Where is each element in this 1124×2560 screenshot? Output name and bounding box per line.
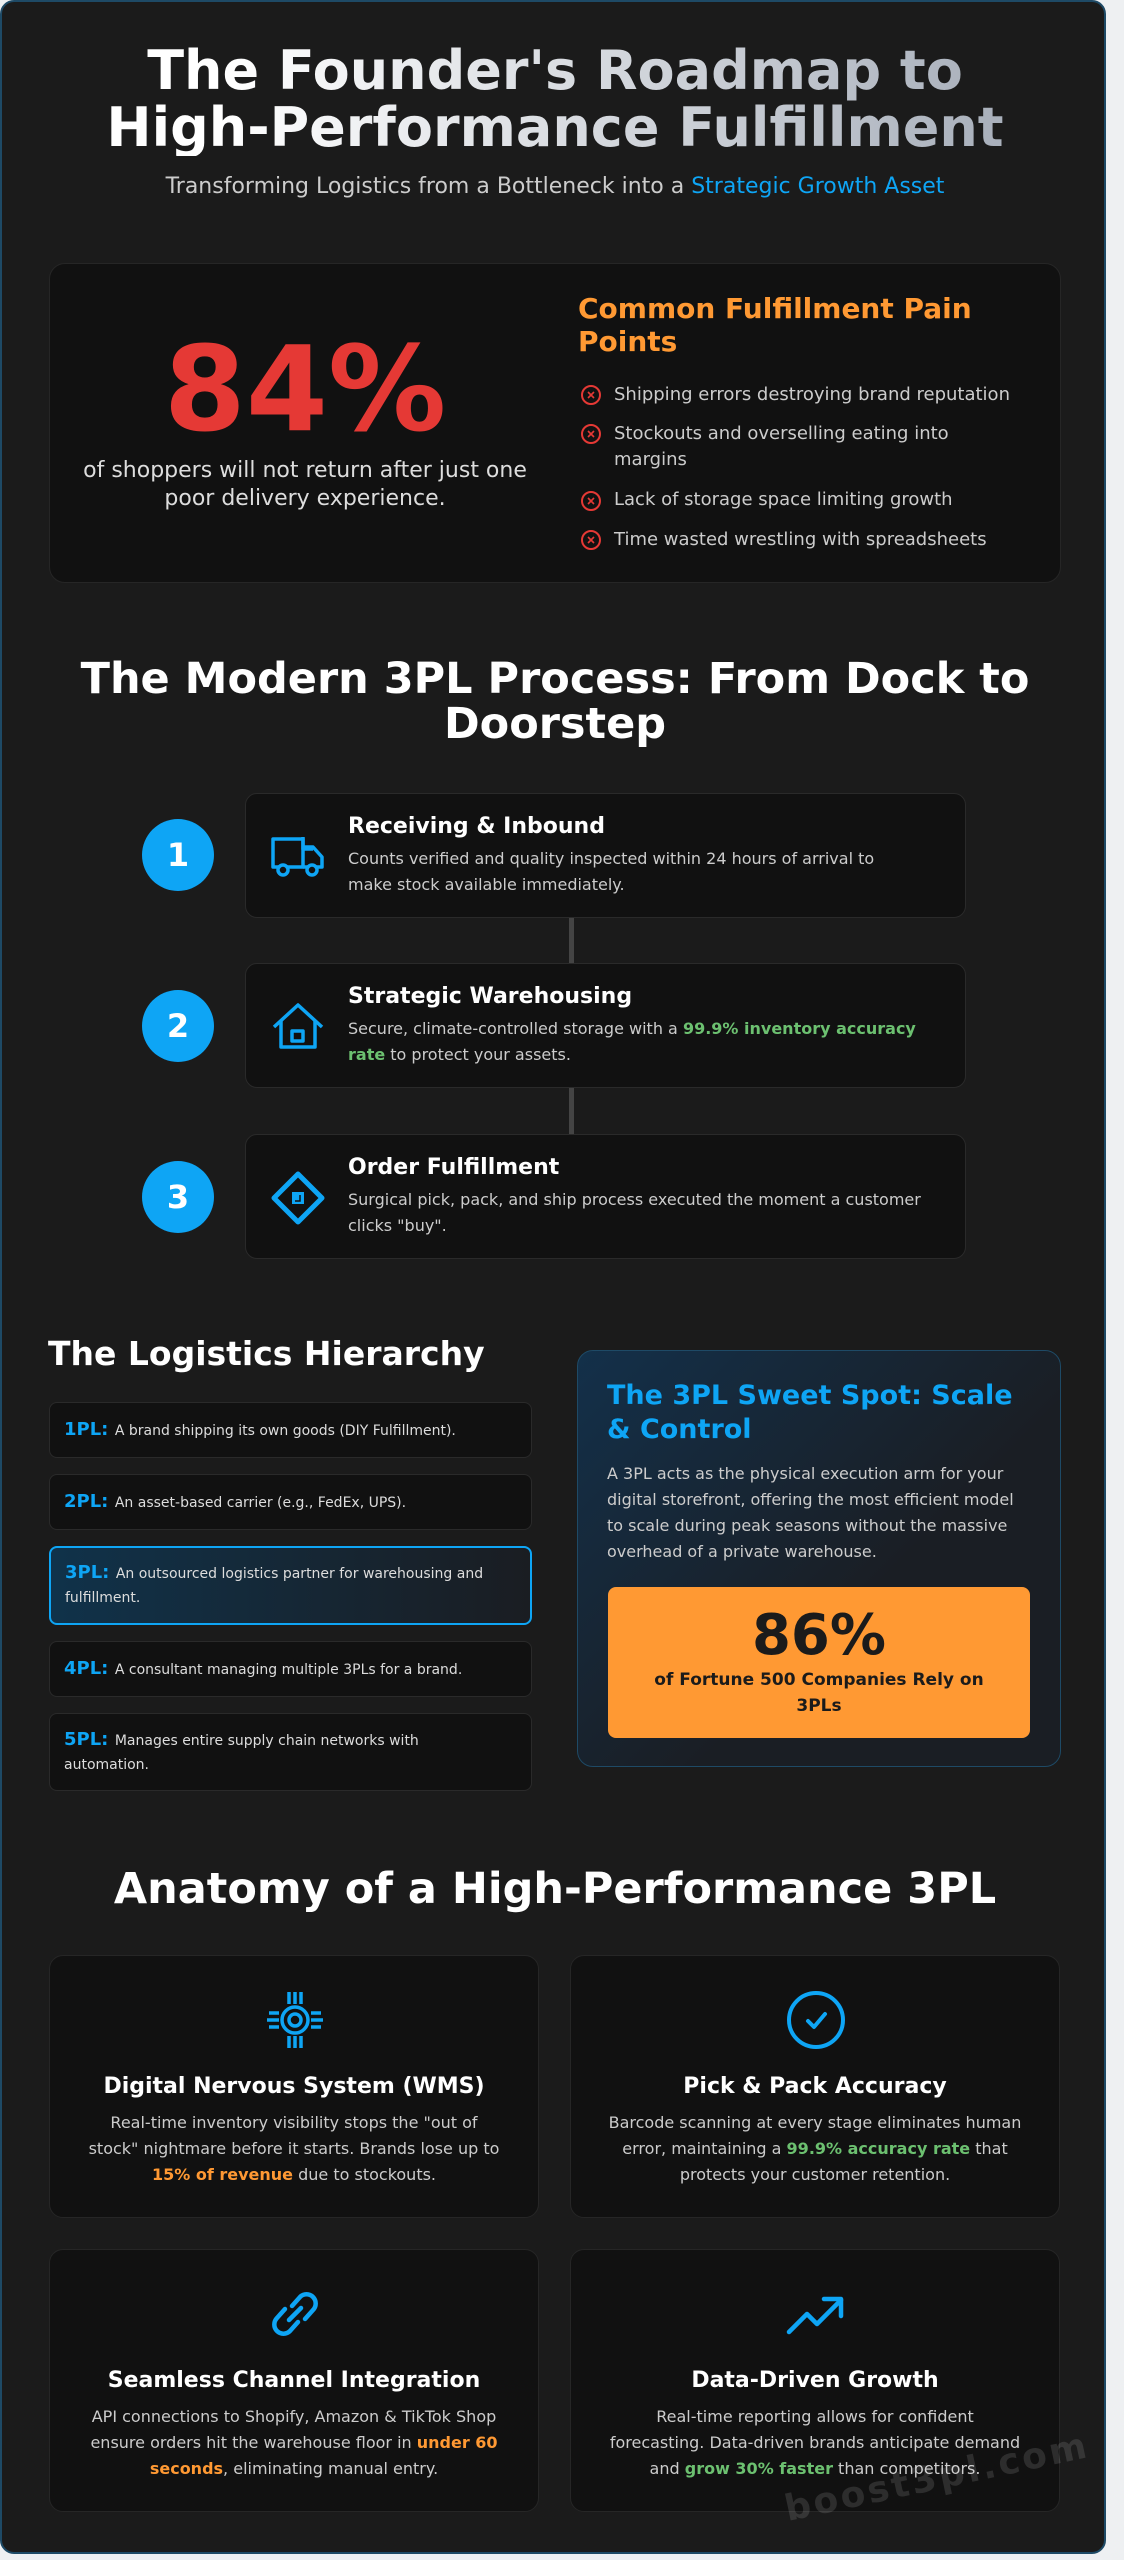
title bbox=[2, 42, 1108, 156]
feature: channel integration: Seamless Channel Integration bbox=[108, 2368, 480, 2393]
feature: WMS: Digital Nervous System (WMS) bbox=[103, 2074, 485, 2099]
stat box 86% bbox=[608, 1587, 1030, 1738]
icon: check circle bbox=[787, 1991, 845, 2049]
feature: WMS bbox=[49, 1955, 539, 2218]
hierarchy list: 4PL: A consultant managing multiple 3PLs for a brand. bbox=[64, 1658, 462, 1678]
feature: data-driven growth: Real-time reporting allows for confident bbox=[656, 2407, 974, 2426]
watermark: boost3pl.com bbox=[781, 2425, 1093, 2530]
feature: channel integration: API connections to Shopify, Amazon & TikTok Shop bbox=[92, 2407, 496, 2426]
panel: stat and pain points: Time wasted wrestling with spreadsheets bbox=[614, 529, 987, 550]
stat caption: of shoppers will not return after just one poor delivery experience. bbox=[83, 458, 527, 511]
feature: data-driven growth bbox=[570, 2249, 1060, 2512]
feature: WMS: Real-time inventory visibility stops the "out of bbox=[110, 2113, 478, 2132]
number circle 3 bbox=[142, 1161, 214, 1233]
hierarchy list: 2PL: An asset-based carrier (e.g., FedEx, UPS). bbox=[64, 1490, 406, 1512]
feature: pick & pack: Barcode scanning at every stage eliminates human bbox=[609, 2113, 1021, 2132]
title: The Founder's Roadmap to bbox=[147, 39, 963, 102]
step 2: Strategic Warehousing bbox=[348, 984, 632, 1009]
feature: data-driven growth: and grow 30% faster than competitors. bbox=[650, 2459, 980, 2478]
sweet spot heading: The 3PL Sweet Spot: Scale & Control bbox=[607, 1380, 1013, 1445]
hierarchy list: 5PL: Manages entire supply chain networks with bbox=[64, 1728, 419, 1750]
sweet spot paragraph bbox=[607, 1464, 1014, 1561]
panel: stat and pain points bbox=[49, 263, 1061, 583]
sweet spot paragraph: A 3PL acts as the physical execution arm for your digital storefront, offering the most efficient model bbox=[607, 1464, 1014, 1509]
icon: diamond package bbox=[272, 1172, 324, 1224]
icon: link bbox=[272, 2292, 318, 2336]
heading: logistics hierarchy: The Logistics Hierarchy bbox=[48, 1334, 485, 1373]
feature: WMS: 15% of revenue due to stockouts. bbox=[152, 2165, 436, 2184]
feature: pick & pack: protects your customer retention. bbox=[680, 2165, 950, 2184]
heading: modern 3PL process: Doorstep bbox=[444, 699, 666, 749]
heading: modern 3PL process: The Modern 3PL Process: From Dock to bbox=[81, 654, 1029, 704]
title: High-Performance Fulfillment bbox=[106, 96, 1004, 159]
hierarchy list bbox=[49, 1402, 532, 1791]
heading: anatomy: Anatomy of a High-Performance 3PL bbox=[114, 1864, 996, 1914]
step 1 bbox=[142, 793, 966, 918]
icon: trending up bbox=[786, 2296, 844, 2334]
stat box 86%: 86% bbox=[752, 1603, 886, 1668]
feature: data-driven growth: forecasting. Data-driven brands anticipate demand bbox=[610, 2433, 1020, 2452]
pain points list bbox=[581, 384, 1010, 550]
icon: warehouse house bbox=[272, 1003, 324, 1049]
number circle 1: 1 bbox=[167, 836, 189, 874]
feature: data-driven growth: Data-Driven Growth bbox=[691, 2368, 939, 2393]
feature: WMS: stock" nightmare before it starts. Brands lose up to bbox=[89, 2139, 499, 2158]
hierarchy list: 3PL: An outsourced logistics partner for warehousing and fulfillment. bbox=[65, 1562, 483, 1606]
number circle 2: 2 bbox=[167, 1007, 189, 1045]
icon: chip bbox=[267, 1992, 323, 2048]
feature: channel integration: ensure orders hit the warehouse floor in under 60 bbox=[90, 2433, 498, 2452]
panel: 3PL sweet spot bbox=[577, 1350, 1061, 1767]
connector lines bbox=[569, 917, 574, 1134]
feature: pick & pack bbox=[570, 1955, 1060, 2218]
subtitle: Transforming Logistics from a Bottleneck into a Strategic Growth Asset bbox=[166, 174, 944, 199]
heading: modern 3PL process bbox=[80, 654, 1029, 749]
feature: pick & pack: error, maintaining a 99.9% accuracy rate that bbox=[622, 2139, 1008, 2158]
big stat 84%: 84% bbox=[164, 320, 446, 458]
step 3: Order Fulfillment bbox=[348, 1155, 559, 1180]
step 3 bbox=[142, 1134, 966, 1259]
number circle 2 bbox=[142, 990, 214, 1062]
pain points heading: Common Fulfillment Pain Points bbox=[578, 292, 972, 358]
step 1: Counts verified and quality inspected within 24 hours of arrival to make stock available immediately. bbox=[348, 849, 874, 894]
hierarchy list: 1PL: A brand shipping its own goods (DIY Fulfillment). bbox=[64, 1418, 456, 1440]
hierarchy list: automation. bbox=[64, 1756, 149, 1772]
panel: stat and pain points: Lack of storage space limiting growth bbox=[614, 489, 953, 510]
step 1: Receiving & Inbound bbox=[348, 814, 605, 839]
number circle 3: 3 bbox=[167, 1178, 189, 1216]
sweet spot paragraph: to scale during peak seasons without the massive overhead of a private warehouse. bbox=[607, 1516, 1007, 1561]
number circle 1 bbox=[142, 819, 214, 891]
feature: channel integration: seconds, eliminating manual entry. bbox=[150, 2459, 438, 2478]
step 3: Surgical pick, pack, and ship process executed the moment a customer clicks "buy". bbox=[348, 1190, 921, 1235]
stat box 86%: of Fortune 500 Companies Rely on 3PLs bbox=[654, 1670, 984, 1716]
panel: stat and pain points: Shipping errors destroying brand reputation bbox=[614, 384, 1010, 405]
icon: truck bbox=[271, 837, 324, 877]
step 2 bbox=[142, 963, 966, 1088]
feature: channel integration bbox=[49, 2249, 539, 2512]
panel: stat and pain points: Stockouts and overselling eating into margins bbox=[614, 423, 949, 470]
feature: pick & pack: Pick & Pack Accuracy bbox=[683, 2074, 947, 2099]
step 2: Secure, climate-controlled storage with a 99.9% inventory accuracy rate to protect your assets. bbox=[348, 1019, 916, 1064]
